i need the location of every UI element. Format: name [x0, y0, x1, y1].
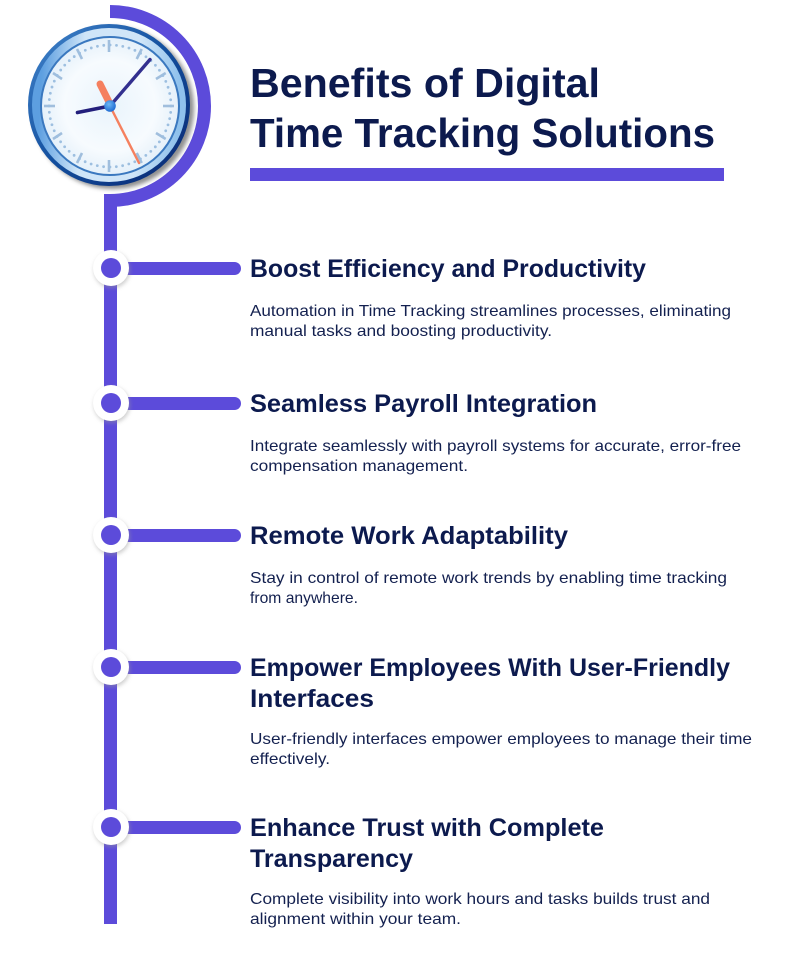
description	[250, 891, 710, 928]
heading: Boost Efficiency and Productivity	[250, 255, 646, 283]
heading: Empower Employees With User-Friendly	[250, 654, 730, 682]
title: Time Tracking Solutions	[250, 110, 715, 156]
heading: Seamless Payroll Integration	[250, 390, 597, 418]
connector node 3	[93, 517, 241, 555]
description	[250, 438, 741, 475]
description: Complete visibility into work hours and tasks builds trust and	[250, 891, 710, 908]
description: Automation in Time Tracking streamlines processes, eliminating	[250, 303, 731, 320]
heading	[250, 814, 604, 873]
panel: payroll integration	[93, 385, 741, 475]
description: Integrate seamlessly with payroll systems for accurate, error-free	[250, 438, 741, 455]
description: effectively.	[250, 751, 330, 768]
heading: Remote Work Adaptability	[250, 522, 568, 550]
description	[250, 303, 731, 340]
panel: empower employees	[93, 649, 752, 768]
description: manual tasks and boosting productivity.	[250, 323, 552, 340]
clock minute dots	[49, 45, 171, 167]
description: alignment within your team.	[250, 911, 461, 928]
clock tick marks	[44, 40, 174, 172]
clock hands	[78, 60, 150, 163]
panel: boost efficiency	[93, 250, 731, 340]
connector node 5	[93, 809, 241, 847]
description: Stay in control of remote work trends by enabling time tracking	[250, 570, 727, 587]
title	[250, 60, 715, 156]
description: compensation management.	[250, 458, 468, 475]
connector node 1	[93, 250, 241, 288]
title: Benefits of Digital	[250, 60, 600, 106]
heading: Interfaces	[250, 685, 374, 713]
heading	[250, 654, 730, 713]
connector node 4	[93, 649, 241, 687]
description	[250, 570, 727, 607]
heading: Transparency	[250, 845, 413, 873]
icon: clock	[28, 24, 194, 189]
description: User-friendly interfaces empower employees to manage their time	[250, 731, 752, 748]
panel: remote work	[93, 517, 727, 607]
heading: Enhance Trust with Complete	[250, 814, 604, 842]
timeline spine with arc around clock	[104, 12, 204, 924]
description: from anywhere.	[250, 590, 358, 607]
connector node 2	[93, 385, 241, 423]
description	[250, 731, 752, 768]
title underline	[250, 168, 724, 181]
panel: enhance trust	[93, 809, 710, 928]
